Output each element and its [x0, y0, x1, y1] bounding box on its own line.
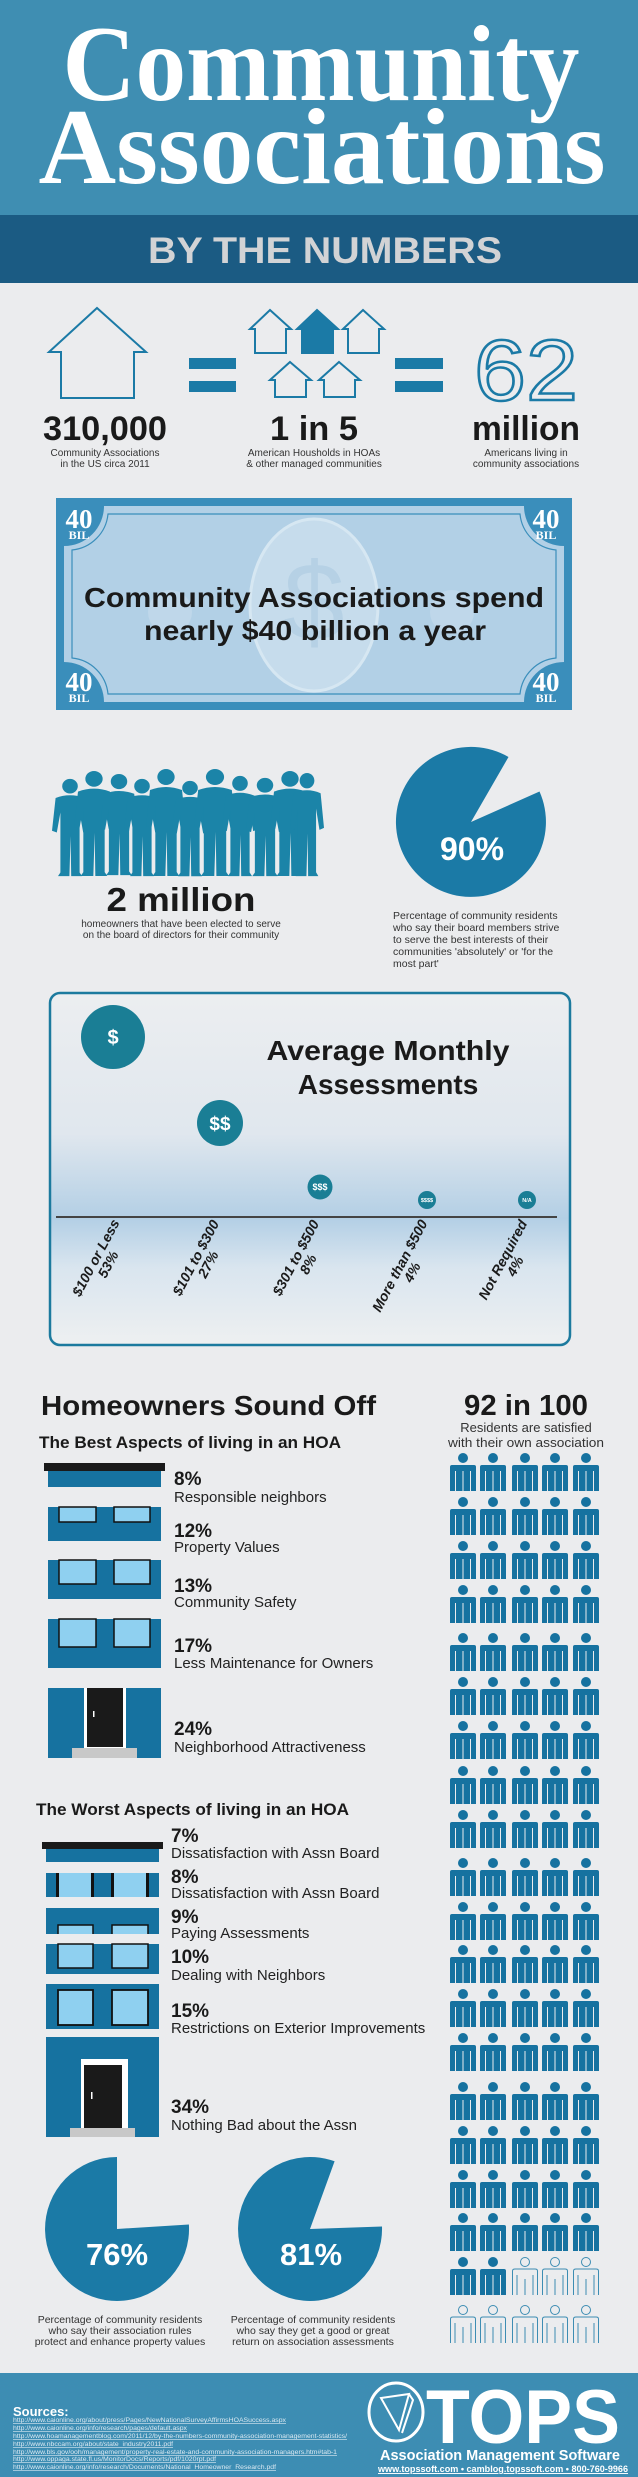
axis labels: $100 or Less — [68, 1216, 123, 1300]
list: worst aspects: 9% — [171, 1907, 199, 1928]
caption: 81%: who say they get a good or great — [236, 2325, 390, 2337]
stat: 1 in 5 — [246, 410, 382, 470]
axis labels: 4% — [503, 1253, 527, 1280]
dollar bill panel: $ — [283, 541, 345, 664]
axis labels: $101 to $300 — [168, 1217, 222, 1299]
stat: 310,000: Community Associations — [51, 448, 159, 459]
panel: average monthly assessments chart: $$$$ — [421, 1198, 433, 1204]
logo: TOPS: Association Management Software — [380, 2447, 620, 2464]
axis labels — [68, 1216, 543, 1321]
sources: http://www.caionline.org/about/press/Pages/NewNationalSurveyAffirmsHOASuccess.aspx — [13, 2417, 287, 2424]
list: worst aspects: 34% — [171, 2097, 209, 2118]
icon: equals 1 — [189, 358, 236, 392]
sources — [13, 2404, 347, 2471]
bill text: nearly $40 billion a year — [144, 615, 486, 646]
caption: 90%: communities 'absolutely' or 'for the — [393, 946, 553, 958]
stat: 310,000: in the US circa 2011 — [60, 459, 150, 470]
chart title — [266, 1035, 510, 1100]
list: worst aspects: 7% — [171, 1826, 199, 1847]
caption: 76%: who say their association rules — [48, 2325, 192, 2337]
list: worst aspects: Restrictions on Exterior Improvements — [171, 2020, 425, 2037]
list: worst aspects: Dissatisfaction with Assn Board — [171, 1845, 379, 1862]
sources: http://www.caionline.org/info/research/Documents/National_Homeowner_Research.pdf — [13, 2464, 276, 2471]
stat: 1 in 5: American Housholds in HOAs — [248, 448, 380, 459]
list: best aspects: 17% — [174, 1636, 212, 1657]
chart title: Assessments — [298, 1069, 478, 1100]
sources: http://www.nbccam.org/about/state_industry2011.pdf — [13, 2441, 173, 2448]
pie chart: 90%: 90% — [440, 831, 504, 867]
heading: Homeowners Sound Off: Homeowners Sound Off — [41, 1390, 377, 1421]
stat: 1 in 5: & other managed communities — [246, 459, 382, 470]
pie chart: 76% — [45, 2157, 189, 2301]
sources: http://www.bls.gov/ooh/management/property-real-estate-and-community-association-managers.htm#tab-1 — [13, 2449, 338, 2456]
stat: 2 million: homeowners that have been elected to serve — [81, 919, 281, 930]
header banner — [0, 0, 638, 215]
list: worst aspects — [171, 1826, 425, 2134]
axis labels: 53% — [94, 1248, 122, 1280]
caption: 76% — [35, 2314, 205, 2348]
list: worst aspects: Dealing with Neighbors — [171, 1967, 325, 1984]
stat: 92 in 100 — [447, 1390, 604, 1450]
pie chart: 81% — [238, 2157, 382, 2301]
list: best aspects: Neighborhood Attractiveness — [174, 1739, 366, 1756]
bill text: Community Associations spend — [84, 582, 544, 613]
caption: 81%: Percentage of community residents — [231, 2314, 395, 2326]
list: best aspects: 13% — [174, 1576, 212, 1597]
axis labels: More than $500 — [369, 1217, 431, 1314]
bill corner labels: 40 — [66, 667, 92, 697]
stat: 92 in 100: with their own association — [447, 1435, 604, 1450]
footer — [0, 2373, 638, 2477]
icon: equals 2 — [395, 358, 443, 392]
bill corner labels: 40 — [532, 504, 560, 534]
subheading: worst aspects: The Worst Aspects of living in an HOA — [36, 1800, 349, 1819]
caption: 90%: who say their board members strive — [392, 922, 559, 934]
list: best aspects: Property Values — [174, 1539, 280, 1556]
axis labels: $301 to $500 — [268, 1217, 322, 1299]
stat: 2 million — [81, 881, 281, 941]
sources: http://www.hoamanagementblog.com/2011/12/by-the-numbers-community-association-management-statistics/ — [13, 2433, 347, 2440]
title: Associations — [38, 88, 606, 207]
building: worst aspects — [42, 1842, 163, 2137]
sources: http://www.caionline.org/info/research/pages/default.aspx — [13, 2425, 188, 2432]
pictogram: 92 of 100 residents — [450, 1453, 599, 2343]
sources: http://www.oppaga.state.fl.us/MonitorDocs/Reports/pdf/1020rpt.pdf — [13, 2456, 216, 2463]
list: best aspects: 12% — [174, 1521, 212, 1542]
stat: 1 in 5: 1 in 5 — [270, 410, 358, 448]
logo: TOPS: TOPS — [426, 2375, 620, 2460]
stat: 2 million: 2 million — [106, 881, 256, 918]
outline number 62: 62 — [474, 323, 578, 419]
list: best aspects: Community Safety — [174, 1594, 297, 1611]
pie chart: 90% — [396, 747, 546, 897]
list: worst aspects: Paying Assessments — [171, 1925, 309, 1942]
panel: average monthly assessments chart: $$ — [209, 1114, 231, 1135]
stat: 92 in 100: Residents are satisfied — [460, 1420, 592, 1435]
stat: 310,000 — [43, 410, 167, 470]
stat: 310,000: 310,000 — [43, 410, 167, 448]
list: worst aspects: Dissatisfaction with Assn Board — [171, 1885, 379, 1902]
axis labels: Not Required — [475, 1217, 530, 1302]
building: best aspects — [44, 1463, 165, 1758]
logo: TOPS — [369, 2375, 628, 2475]
stat: 62 million — [472, 410, 580, 470]
caption: 76%: Percentage of community residents — [38, 2314, 202, 2326]
stat: 62 million: community associations — [473, 459, 579, 470]
stat: 62 million: Americans living in — [484, 448, 568, 459]
pie chart: 76%: 76% — [86, 2237, 148, 2272]
caption: 90%: most part' — [393, 958, 439, 970]
caption: 76%: protect and enhance property values — [35, 2336, 205, 2348]
bill corner labels — [66, 504, 560, 705]
bill corner labels: 40 — [532, 667, 560, 697]
panel: average monthly assessments chart: $ — [107, 1027, 119, 1049]
list: best aspects — [174, 1469, 373, 1756]
panel: average monthly assessments chart — [50, 993, 570, 1345]
list: worst aspects: 8% — [171, 1867, 199, 1888]
axis labels: 4% — [400, 1259, 424, 1286]
icon: big house — [49, 308, 146, 398]
caption: 81% — [231, 2314, 395, 2348]
subtitle band: BY THE NUMBERS — [148, 230, 502, 271]
list: best aspects: Responsible neighbors — [174, 1489, 327, 1506]
caption: 90%: to serve the best interests of their — [393, 934, 549, 946]
caption: 90% — [392, 910, 559, 970]
list: worst aspects: 10% — [171, 1947, 209, 1968]
bill corner labels: 40 — [66, 504, 92, 534]
subtitle band — [0, 215, 638, 283]
pie chart: 81%: 81% — [280, 2237, 342, 2272]
panel: average monthly assessments chart: $$$ — [312, 1182, 328, 1192]
title — [38, 5, 606, 207]
sources: Sources: — [13, 2404, 69, 2419]
list: worst aspects: Nothing Bad about the Assn — [171, 2117, 357, 2134]
bill corner labels: BIL — [536, 528, 556, 542]
list: best aspects: Less Maintenance for Owners — [174, 1655, 373, 1672]
list: best aspects: 8% — [174, 1469, 202, 1490]
subheading: best aspects: The Best Aspects of living in an HOA — [39, 1433, 341, 1452]
axis labels: 8% — [296, 1251, 320, 1277]
stat: 92 in 100: 92 in 100 — [464, 1390, 588, 1422]
dollar bill panel — [56, 498, 572, 710]
caption: 90%: Percentage of community residents — [393, 910, 558, 922]
chart title: Average Monthly — [266, 1035, 510, 1066]
axis labels: 27% — [194, 1248, 222, 1281]
bill corner labels: BIL — [69, 528, 89, 542]
icon: five small houses — [250, 310, 384, 397]
panel: average monthly assessments chart: N/A — [522, 1198, 532, 1204]
title: Community — [62, 5, 580, 124]
bill corner labels: BIL — [536, 691, 556, 705]
people silhouettes — [52, 769, 324, 876]
caption: 81%: return on association assessments — [232, 2336, 394, 2348]
stat: 2 million: on the board of directors for their community — [83, 930, 279, 941]
list: worst aspects: 15% — [171, 2001, 209, 2022]
bill corner labels: BIL — [69, 691, 89, 705]
list: best aspects: 24% — [174, 1719, 212, 1740]
bill text — [84, 582, 544, 646]
logo: TOPS: www.topssoft.com • camblog.topssoft.com • 800-760-9966 — [377, 2464, 628, 2475]
bubbles — [81, 1005, 536, 1209]
stat: 62 million: million — [472, 410, 580, 448]
